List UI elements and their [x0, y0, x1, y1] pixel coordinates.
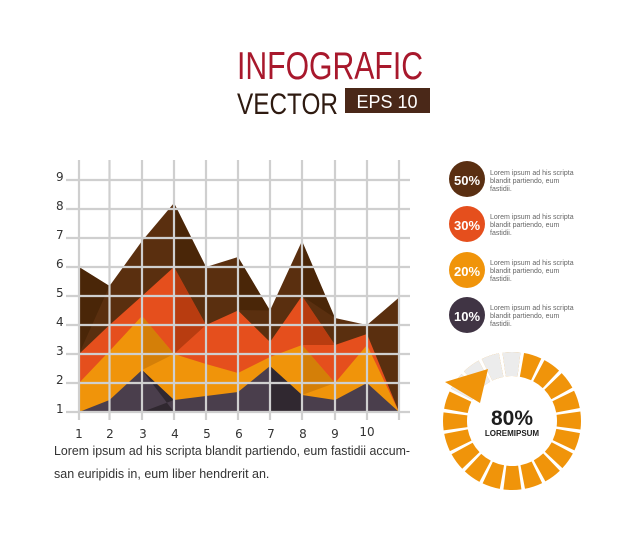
text block: description	[54, 444, 410, 481]
progress ring 80%	[435, 344, 589, 498]
y axis labels: 1	[56, 402, 64, 416]
layer: dark gray	[79, 366, 399, 412]
legend item 20%	[449, 252, 574, 288]
y axis labels: 3	[56, 344, 64, 358]
legend item 10%	[449, 297, 574, 333]
progress ring 80%: LOREMIPSUM	[485, 429, 539, 438]
layer: dark brown	[79, 203, 399, 412]
x axis labels: 5	[203, 427, 211, 441]
text block: description: san euripidis in, eum liber hendrerit an.	[54, 467, 269, 481]
x axis labels: 3	[139, 427, 147, 441]
legend item 50%: Lorem ipsum ad his scripta	[490, 170, 574, 177]
x axis labels: 9	[331, 427, 339, 441]
y axis labels: 9	[56, 170, 64, 184]
layer: red orange	[79, 267, 399, 412]
x axis labels: 8	[299, 427, 307, 441]
legend item 10%: fastidii.	[490, 321, 512, 328]
x axis labels: 2	[106, 427, 114, 441]
legend item 20%: blandit partiendo, eum	[490, 268, 559, 275]
legend item 50%: blandit partiendo, eum	[490, 178, 559, 185]
legend item 20%: fastidii.	[490, 276, 512, 283]
legend item 10%: blandit partiendo, eum	[490, 313, 559, 320]
legend item 30%: 30%	[454, 218, 480, 233]
y axis labels: 6	[56, 257, 64, 271]
badge: eps 10	[345, 88, 430, 113]
y axis labels	[56, 170, 64, 416]
x axis labels	[75, 425, 375, 441]
x axis labels: 6	[235, 427, 243, 441]
title	[237, 45, 430, 121]
ring label: 80%	[491, 407, 533, 430]
legend item 10%: Lorem ipsum ad his scripta	[490, 305, 574, 312]
text block: description: Lorem ipsum ad his scripta blandit partiendo, eum fastidii accum-	[54, 444, 410, 458]
layer: orange	[79, 316, 399, 412]
title: INFOGRAFIC	[237, 45, 423, 88]
y axis labels: 2	[56, 373, 64, 387]
x axis labels: 4	[171, 427, 179, 441]
legend item 30%: fastidii.	[490, 230, 512, 237]
y axis labels: 7	[56, 228, 64, 242]
legend item 10%: 10%	[454, 309, 480, 324]
x axis labels: 7	[267, 427, 275, 441]
icon: arrow head	[445, 369, 488, 403]
legend item 30%: Lorem ipsum ad his scripta	[490, 214, 574, 221]
y axis labels: 4	[56, 315, 64, 329]
x axis labels: 10	[359, 425, 375, 439]
grid	[66, 160, 410, 420]
legend item 20%: Lorem ipsum ad his scripta	[490, 260, 574, 267]
area chart	[56, 160, 410, 441]
legend	[449, 161, 574, 333]
subtitle: vector: VECTOR	[237, 88, 338, 121]
legend item 50%: 50%	[454, 173, 480, 188]
legend item 20%: 20%	[454, 264, 480, 279]
y axis labels: 5	[56, 286, 64, 300]
legend item 30%	[449, 206, 574, 242]
x axis labels: 1	[75, 427, 83, 441]
legend item 50%	[449, 161, 574, 197]
y axis labels: 8	[56, 199, 64, 213]
legend item 50%: fastidii.	[490, 186, 512, 193]
badge: eps 10: EPS 10	[356, 92, 418, 112]
legend item 30%: blandit partiendo, eum	[490, 222, 559, 229]
